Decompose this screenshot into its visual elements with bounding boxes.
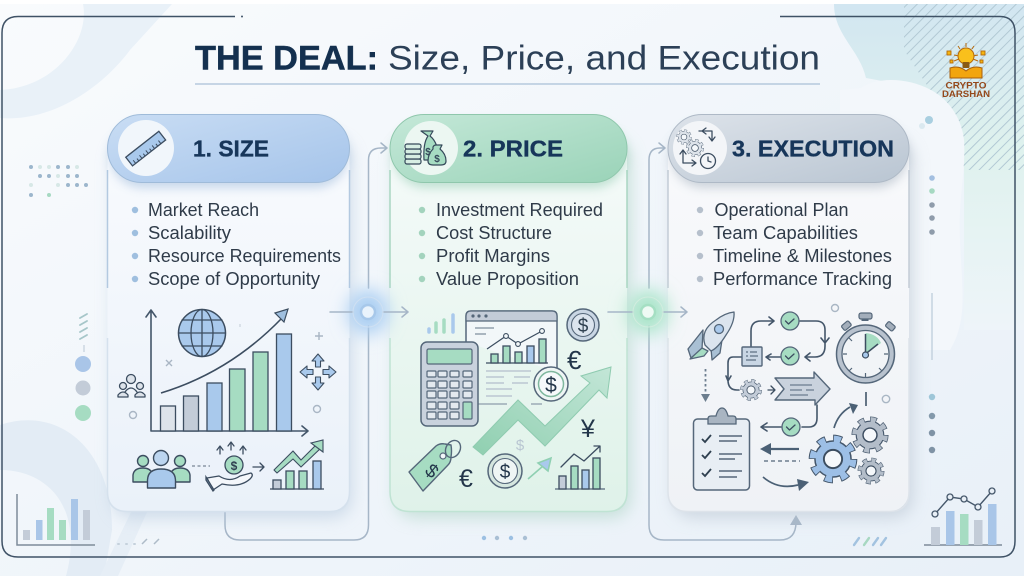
header pill: price: $ [425,147,431,158]
list: size: Scope of Opportunity [148,269,320,289]
header pill: execution: 3. EXECUTION [732,136,894,162]
list: price: Investment Required [436,200,603,220]
icon: dash and dot [832,304,890,406]
chart: bottom right mini bars with line [924,488,1002,545]
icon: coin centre [534,367,568,401]
panel: size [108,114,352,518]
logo: Crypto Darshan: CRYPTO [946,80,986,90]
header pill: price [390,114,627,188]
list: price: Value Proposition [436,269,579,289]
icon: coin bottom: $ [500,462,511,483]
icon: coin bottom [488,454,522,488]
icon: mini bars [429,315,453,332]
icon: price tag [409,438,464,491]
side decoration: right dots [919,116,935,453]
icon: calculator [421,342,478,426]
arrowhead: card 3 return [790,515,802,525]
list: size: Resource Requirements [148,246,341,266]
header pill: execution [668,114,909,188]
panel: price [390,114,631,518]
title: THE DEAL: [195,40,378,78]
icon: growth arrow [473,367,611,455]
list: execution: Team Capabilities [713,223,858,243]
list: execution [697,200,892,289]
icon: expand arrows [300,354,336,390]
icon: team [133,450,190,488]
title: Size, Price, and Execution [388,40,820,78]
icon: euro lower: € [459,465,473,493]
header pill: size: 1. SIZE [193,136,269,162]
chart: browser window [466,311,557,404]
header pill: size [108,114,350,188]
header pill: price: 2. PRICE [463,136,563,162]
list: price: Cost Structure [436,223,552,243]
icon: dotted down arrow [701,369,710,402]
side decoration: left slashes and circles [75,314,91,421]
icon: yen: ¥ [580,415,595,443]
icon: small arrow [528,458,551,479]
flowchart: lower arrows [760,403,858,491]
connector: node 2 glow and arrow [608,290,687,334]
header pill: price: $ [434,154,440,165]
list: execution: Operational Plan [714,200,848,220]
list: price [419,200,603,289]
connector: card 1 to card 2 routing line [225,143,387,540]
logo: Crypto Darshan [942,43,990,99]
icon: price tag: $ [421,460,442,483]
chart: bottom left mini bars [17,494,95,545]
connector: card 2 to card 3 routing line [649,143,796,540]
connector: node 1 glow and arrow [330,290,408,334]
icon: small people [118,374,145,397]
icon: faint dollar: $ [516,437,525,454]
side decoration: bottom dots and slashes [118,536,886,545]
bar chart: growth [146,309,308,436]
flowchart: process loop [726,312,830,405]
icon: mini growth chart [270,440,324,489]
icon: gears [814,420,884,482]
list: price: Profit Margins [436,246,550,266]
icon: coin top [567,309,599,341]
list: size: Market Reach [148,200,259,220]
icon: small marks [130,324,323,418]
icon: euro: € [567,345,582,375]
list: execution: Timeline & Milestones [713,246,892,266]
panel: execution [668,114,913,518]
logo: Crypto Darshan: DARSHAN [942,89,990,99]
icon: globe [178,310,226,356]
icon: coin top: $ [578,316,589,337]
list: size: Scalability [148,223,231,243]
icon: small chart [555,446,605,489]
list: execution: Performance Tracking [713,269,892,289]
icon: hand with coin [206,442,264,491]
icon: hand with coin: $ [231,459,238,473]
side decoration: left dots [29,165,88,197]
icon: dotted link [192,465,210,467]
icon: coin centre: $ [545,374,557,397]
icon: stopwatch [836,313,896,383]
title [195,40,820,84]
list: size [132,200,341,289]
icon: rocket [688,312,734,360]
icon: clipboard [694,408,750,490]
